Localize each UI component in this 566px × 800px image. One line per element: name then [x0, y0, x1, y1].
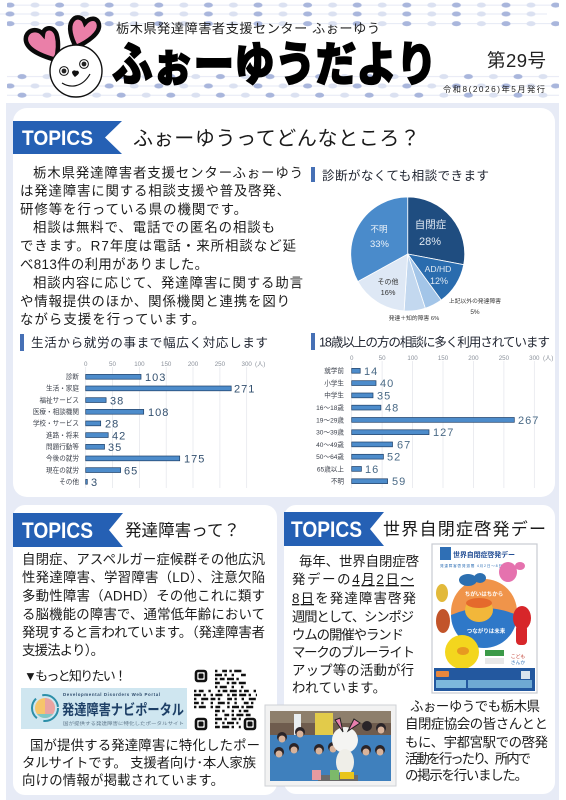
poster: world autism day: 発達障害啓発週間 4月2日～8日: [440, 563, 502, 568]
bar chart: consultation topics: 271: [234, 384, 255, 396]
bar chart: age groups: 35: [377, 390, 391, 402]
photo: group with mascot: [265, 705, 396, 786]
bar chart: age groups: 16: [365, 464, 379, 476]
bar chart: age groups: 267: [518, 415, 539, 427]
bar chart: consultation topics: 35: [108, 442, 122, 454]
bar chart: consultation topics: 300: [242, 361, 252, 368]
text block: awareness week: マークのブルーライト: [292, 644, 415, 660]
bar chart: age groups: 50～64歳: [316, 452, 344, 461]
text block: introduction: できます。R7年度は電話・来所相談など延: [20, 238, 296, 254]
bar chart: age groups: 48: [385, 402, 399, 414]
bar chart: consultation topics: 200: [188, 361, 199, 368]
icon: rabbit mascot: [26, 17, 102, 97]
pie chart: 自閉症: [415, 218, 447, 231]
pie chart: AD/HD: [425, 264, 451, 274]
bar chart: consultation topics: 医療・相談機関: [33, 407, 79, 416]
bar chart: age groups: 50: [379, 355, 386, 362]
banner: portal: [21, 688, 187, 729]
poster: world autism day: [432, 544, 537, 693]
bar chart: consultation topics: 今後の就労: [46, 454, 79, 463]
bar chart: age groups: 40～49歳: [316, 440, 344, 449]
bar chart: age groups: 40: [380, 378, 394, 390]
text block: awareness week: 8日を発達障害啓発: [292, 591, 417, 606]
bar chart: consultation topics: 100: [134, 361, 145, 368]
bar chart: age groups: 19～29歳: [316, 415, 344, 424]
text block: awareness week: アップ等の活動が行: [292, 662, 414, 678]
bar chart: age groups: 小学生: [324, 378, 344, 388]
banner: portal: Developmental Disorders Web Portal: [63, 692, 160, 697]
pie chart: 不明: [370, 224, 388, 234]
text block: introduction: 研修等を行っている県の機関です。: [20, 201, 247, 217]
text block: introduction: ながら支援を行っています。: [20, 312, 205, 327]
bar chart: age groups: 200: [468, 355, 479, 362]
pie chart: 上記以外の発達障害: [449, 297, 501, 305]
heading: developmental disorders: 発達障害って？: [125, 521, 240, 540]
text block: Fuoyu activities: もに、宇都宮駅での啓発: [405, 735, 549, 750]
text block: portal description: 向けの情報が掲載されています。: [22, 773, 224, 788]
bar chart: consultation topics: 50: [109, 361, 116, 368]
text block: definition: 発現すると言われています。（発達障害者: [22, 625, 265, 640]
text block: introduction: べ813件の利用がありました。: [20, 257, 208, 272]
bar chart: consultation topics: (人): [255, 361, 265, 368]
poster: world autism day: こども: [511, 653, 525, 660]
bar chart: consultation topics: 42: [112, 430, 126, 442]
text block: awareness week: 週間として、シンポジ: [292, 610, 414, 624]
header: organisation name: 栃木県発達障害者支援センター ふぉーゆう: [116, 21, 380, 36]
bar chart: age groups: 65歳以上: [317, 464, 344, 473]
bar chart: consultation topics: 生活・家庭: [46, 384, 79, 393]
bar chart: age groups: 67: [397, 440, 411, 452]
topics ribbon 3: [284, 512, 384, 546]
pie chart: [351, 197, 501, 322]
bar chart: consultation topics: 108: [148, 407, 169, 419]
pie chart: 33%: [370, 239, 390, 250]
bar chart: age groups: 300: [529, 355, 540, 362]
banner: portal: 発達障害ナビポータル: [62, 701, 184, 719]
topics ribbon 2: TOPICS: [22, 518, 93, 543]
bar chart: consultation topics: 3: [91, 477, 98, 489]
bar chart: consultation topics: その他: [59, 477, 79, 486]
panel: autism awareness day: [284, 505, 555, 794]
poster: world autism day: つながりは未来: [467, 627, 506, 635]
bar chart: consultation topics: 福祉サービス: [39, 395, 79, 404]
text block: introduction: [20, 166, 303, 327]
bar chart: consultation topics: 現在の就労: [46, 465, 79, 474]
bar chart: age groups: 14: [364, 366, 378, 378]
bar chart: consultation topics: 38: [110, 396, 124, 408]
text block: portal description: 国が提供する発達障害に特化したポー: [30, 738, 260, 753]
text block: definition: る脳機能の障害で、通常低年齢において: [22, 607, 265, 622]
heading: what kind of place: ふぉーゆうってどんなところ？: [133, 127, 420, 150]
bar chart: consultation topics: 診断: [66, 372, 79, 381]
text block: introduction: 相談内容に応じて、発達障害に関する助言: [33, 274, 303, 290]
text block: Fuoyu activities: [405, 699, 549, 783]
bar chart: age groups: (人): [543, 355, 553, 362]
text block: awareness week: われています。: [292, 680, 386, 696]
bar chart: consultation topics: 28: [105, 418, 119, 430]
heading: over 18: 18歳以上の方の相談に多く利用されています: [319, 334, 550, 350]
bar chart: consultation topics: 103: [145, 372, 166, 384]
bar chart: consultation topics: 65: [124, 466, 138, 478]
issue number: 第29号: [487, 50, 546, 71]
bar chart: age groups: [316, 355, 553, 488]
heading: no diagnosis needed: 診断がなくても相談できます: [322, 168, 489, 183]
bar chart: age groups: 不明: [331, 478, 344, 486]
text block: definition: 自閉症、アスペルガー症候群その他広汎: [22, 552, 266, 567]
bar chart: age groups: 中学生: [324, 391, 344, 400]
text block: definition: 多動性障害（ADHD）その他これに類す: [22, 588, 265, 604]
bar chart: age groups: 250: [499, 355, 510, 362]
pie chart: 28%: [419, 236, 441, 248]
QR code: [194, 671, 257, 729]
pie chart: 12%: [430, 276, 448, 286]
text: learn more: ▼もっと知りたい！: [24, 668, 127, 684]
text block: Fuoyu activities: ふぉーゆうでも栃木県: [410, 699, 540, 714]
bar chart: age groups: 150: [438, 355, 449, 362]
issue date: 令和8(2026)年5月発行: [443, 84, 545, 94]
text block: definition: [22, 552, 266, 658]
text block: Fuoyu activities: 自閉症協会の皆さんとと: [405, 716, 548, 732]
bar chart: age groups: 就学前: [324, 366, 344, 375]
bar chart: consultation topics: [33, 361, 265, 489]
heading: world autism day: 世界自閉症啓発デー: [383, 519, 546, 539]
heading: life to work: 生活から就労の事まで幅広く対応します: [31, 336, 268, 350]
poster: world autism day: 世界自閉症啓発デー: [453, 550, 515, 559]
banner: portal: 国が提供する発達障害に特化したポータルサイト: [63, 720, 184, 727]
bar chart: consultation topics: 175: [184, 454, 205, 466]
topics ribbon 2: [13, 513, 123, 547]
text block: awareness week: ウムの開催やランド: [292, 628, 404, 642]
poster: world autism day: ちがいはちから: [465, 590, 503, 598]
bar chart: consultation topics: 学校・サービス: [33, 419, 79, 428]
text block: introduction: 栃木県発達障害者支援センターふぉーゆう: [33, 166, 303, 180]
text block: introduction: 相談は無料で、電話での匿名の相談も: [33, 220, 275, 235]
bar chart: consultation topics: 問題行動等: [46, 442, 79, 451]
bar chart: age groups: 52: [387, 452, 401, 464]
text block: Fuoyu activities: 活動を行ったり、所内で: [405, 752, 531, 766]
text block: definition: 性発達障害、学習障害（LD）、注意欠陥: [22, 570, 265, 585]
panel: what is Fuoyu: [13, 108, 555, 497]
pie chart: 16%: [381, 288, 396, 297]
pie chart: 発達＋知的障害 6%: [389, 314, 439, 322]
text block: introduction: や情報提供のほか、関係機関と連携を図り: [20, 294, 290, 309]
bar chart: consultation topics: 進路・将来: [46, 430, 79, 439]
topics ribbon 1: [13, 121, 122, 154]
bar chart: age groups: 16～18歳: [316, 403, 344, 412]
title: ふぉーゆうだより: [112, 38, 437, 91]
topics ribbon 1: TOPICS: [22, 126, 93, 150]
pie chart: その他: [378, 277, 398, 286]
bar chart: consultation topics: 0: [84, 361, 88, 368]
text block: portal description: タルサイトです。 支援者向け･本人家族: [22, 756, 257, 770]
text block: portal description: [22, 738, 260, 788]
bar chart: age groups: 59: [392, 476, 406, 488]
text block: awareness week: 毎年、世界自閉症啓: [299, 554, 420, 569]
bar chart: age groups: 127: [433, 427, 454, 439]
panel: developmental disorders: [13, 505, 277, 795]
poster: world autism day: さんか: [511, 659, 525, 666]
bar chart: age groups: 100: [407, 355, 418, 362]
pie chart: 5%: [470, 309, 480, 316]
bar chart: consultation topics: 150: [161, 361, 172, 368]
text block: definition: 支援法より）。: [22, 643, 104, 658]
topics ribbon 3: TOPICS: [291, 517, 362, 542]
text block: awareness week: [292, 554, 420, 696]
bar chart: age groups: 0: [350, 355, 354, 362]
text block: Fuoyu activities: の掲示を行いました。: [405, 768, 528, 783]
bar chart: consultation topics: 250: [215, 361, 226, 368]
text block: awareness week: 発デーの4月2日～: [292, 571, 414, 587]
text block: introduction: は発達障害に関する相談支援や普及啓発、: [20, 184, 290, 198]
bar chart: age groups: 30～39歳: [316, 428, 344, 436]
